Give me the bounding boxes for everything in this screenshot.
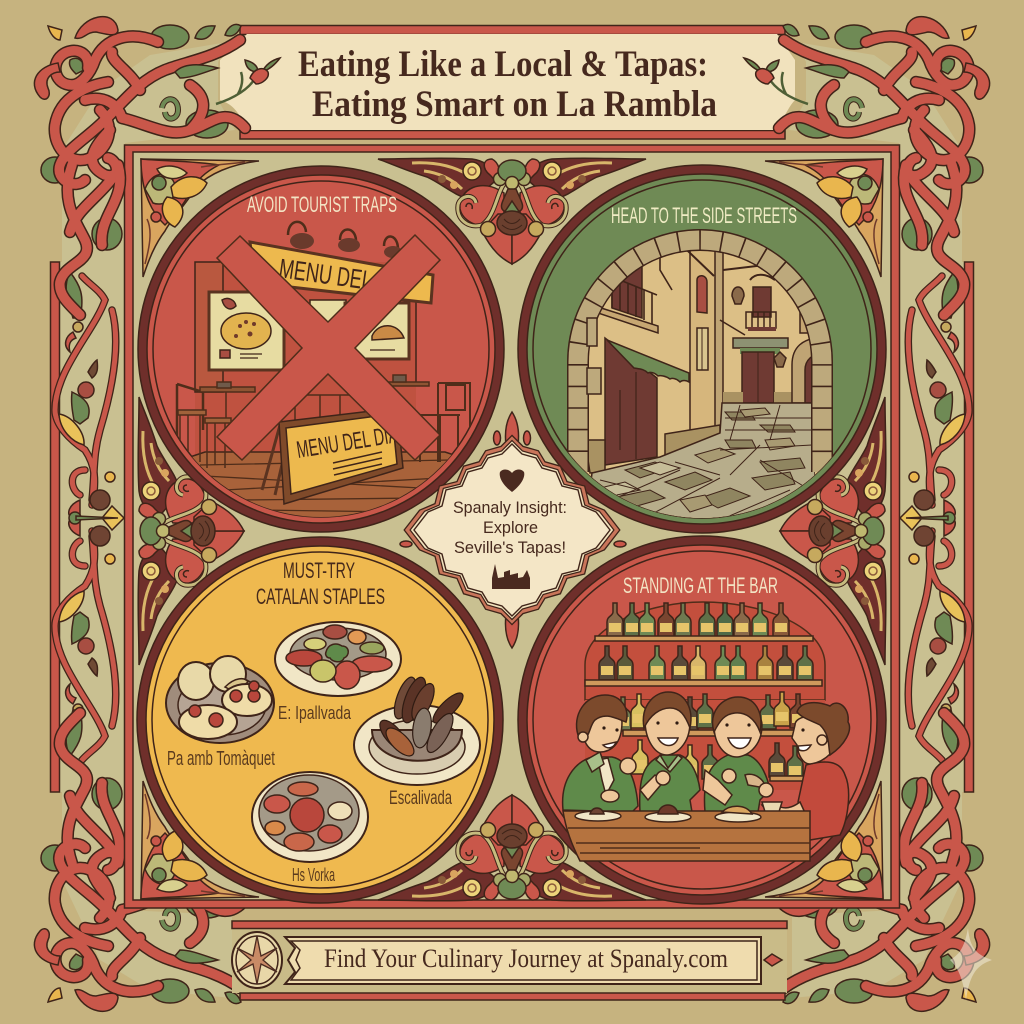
- cartouche text: Explore: [483, 518, 538, 537]
- icon: city skyline: [492, 564, 530, 589]
- corner ornament: bottom left: [34, 710, 245, 1011]
- watermark sparkle: [950, 928, 992, 1000]
- person: woman in red: [762, 703, 849, 840]
- heading: avoid tourist traps: AVOID TOURIST TRAPS: [247, 192, 397, 217]
- side frame: outer vine panels: [50, 262, 974, 792]
- person: third man: [703, 697, 773, 812]
- back shelves with bottles: [585, 602, 825, 790]
- corner ornament: top left: [34, 17, 245, 318]
- heading: standing at the bar: STANDING AT THE BAR: [623, 573, 778, 598]
- footer: call to action box: [285, 937, 761, 984]
- spandrel ornaments in panel corners: [141, 159, 883, 899]
- plate: mixed seafood: [252, 772, 368, 862]
- center ornament: top: [378, 158, 646, 264]
- plinth: [585, 425, 720, 473]
- far buildings: [720, 262, 815, 404]
- footer: compass: [232, 932, 282, 988]
- panel: must-try catalan staples: [137, 537, 503, 903]
- sandwich board sign: MENU DEL DÍA: [295, 421, 400, 464]
- label: garbled dish name: Hs Vorka: [292, 865, 336, 885]
- center ornament: left: [138, 397, 244, 665]
- heading: must-try: [256, 558, 385, 609]
- label: escalivada: Escalivada: [389, 788, 452, 809]
- balcony left: [600, 266, 659, 334]
- plate: pa amb tomaquet: [166, 656, 274, 743]
- icon: heart: [500, 469, 524, 492]
- person: second man: [640, 692, 700, 812]
- corner ornament: bottom right: [779, 710, 990, 1011]
- sandwich board sign: [262, 408, 403, 504]
- panel: avoid tourist traps: [138, 166, 504, 532]
- bar counter: [563, 811, 810, 861]
- cobbled street: [590, 402, 815, 518]
- title banner shape: [220, 26, 795, 139]
- left vine border: [55, 276, 124, 760]
- hanging pans: [288, 222, 402, 258]
- title: [298, 44, 717, 125]
- central cartouche: Spanaly insight: [400, 412, 626, 648]
- top menu sign: [250, 242, 433, 303]
- cartouche text: [453, 498, 567, 557]
- cartouche finials: [400, 412, 626, 648]
- right vine border: [900, 276, 969, 760]
- heading: must-try: CATALAN STAPLES: [256, 584, 385, 609]
- title: Eating Smart on La Rambla: [312, 84, 717, 125]
- footer banner shape: [232, 921, 787, 1000]
- center and right posters: [310, 300, 409, 359]
- heading: side streets: HEAD TO THE SIDE STREETS: [611, 203, 797, 228]
- inner panel frame: [124, 145, 900, 908]
- footer: diamond ornament: [764, 954, 782, 966]
- rosebud sprig left: [216, 58, 280, 104]
- panel: standing at the bar: [518, 536, 886, 904]
- heading: must-try: MUST-TRY: [283, 558, 355, 583]
- rosebud sprig right: [744, 58, 808, 104]
- big red cross: [217, 235, 440, 460]
- stone archway: [578, 240, 822, 472]
- label: pa amb tomaquet: Pa amb Tomàquet: [167, 748, 275, 770]
- plate: mussels: [354, 674, 480, 785]
- scene: stone alley: [575, 230, 825, 530]
- plates on the bar: [575, 805, 761, 822]
- windows: [659, 252, 714, 371]
- person: left man: [563, 695, 638, 812]
- left poster: [209, 292, 284, 370]
- cartouche text: Seville's Tapas!: [454, 538, 566, 557]
- title: Eating Like a Local & Tapas:: [298, 44, 708, 85]
- scene: restaurant terrace: [176, 220, 471, 517]
- center ornament: right: [780, 397, 886, 665]
- panel: head to the side streets: [518, 165, 886, 533]
- center ornament: bottom: [378, 795, 646, 901]
- top menu sign: MENU DEL DÍA: [277, 253, 408, 301]
- label: garbled caption: E: Ipallvada: [278, 703, 352, 723]
- footer: call to action box: Find Your Culinary Journey at Spanaly.com: [324, 944, 728, 973]
- door and awning: [605, 338, 689, 465]
- cartouche text: Spanaly Insight:: [453, 498, 567, 517]
- tables and chairs: [177, 375, 470, 468]
- plate: vegetables: [275, 622, 401, 696]
- corner ornament: top right: [779, 17, 990, 318]
